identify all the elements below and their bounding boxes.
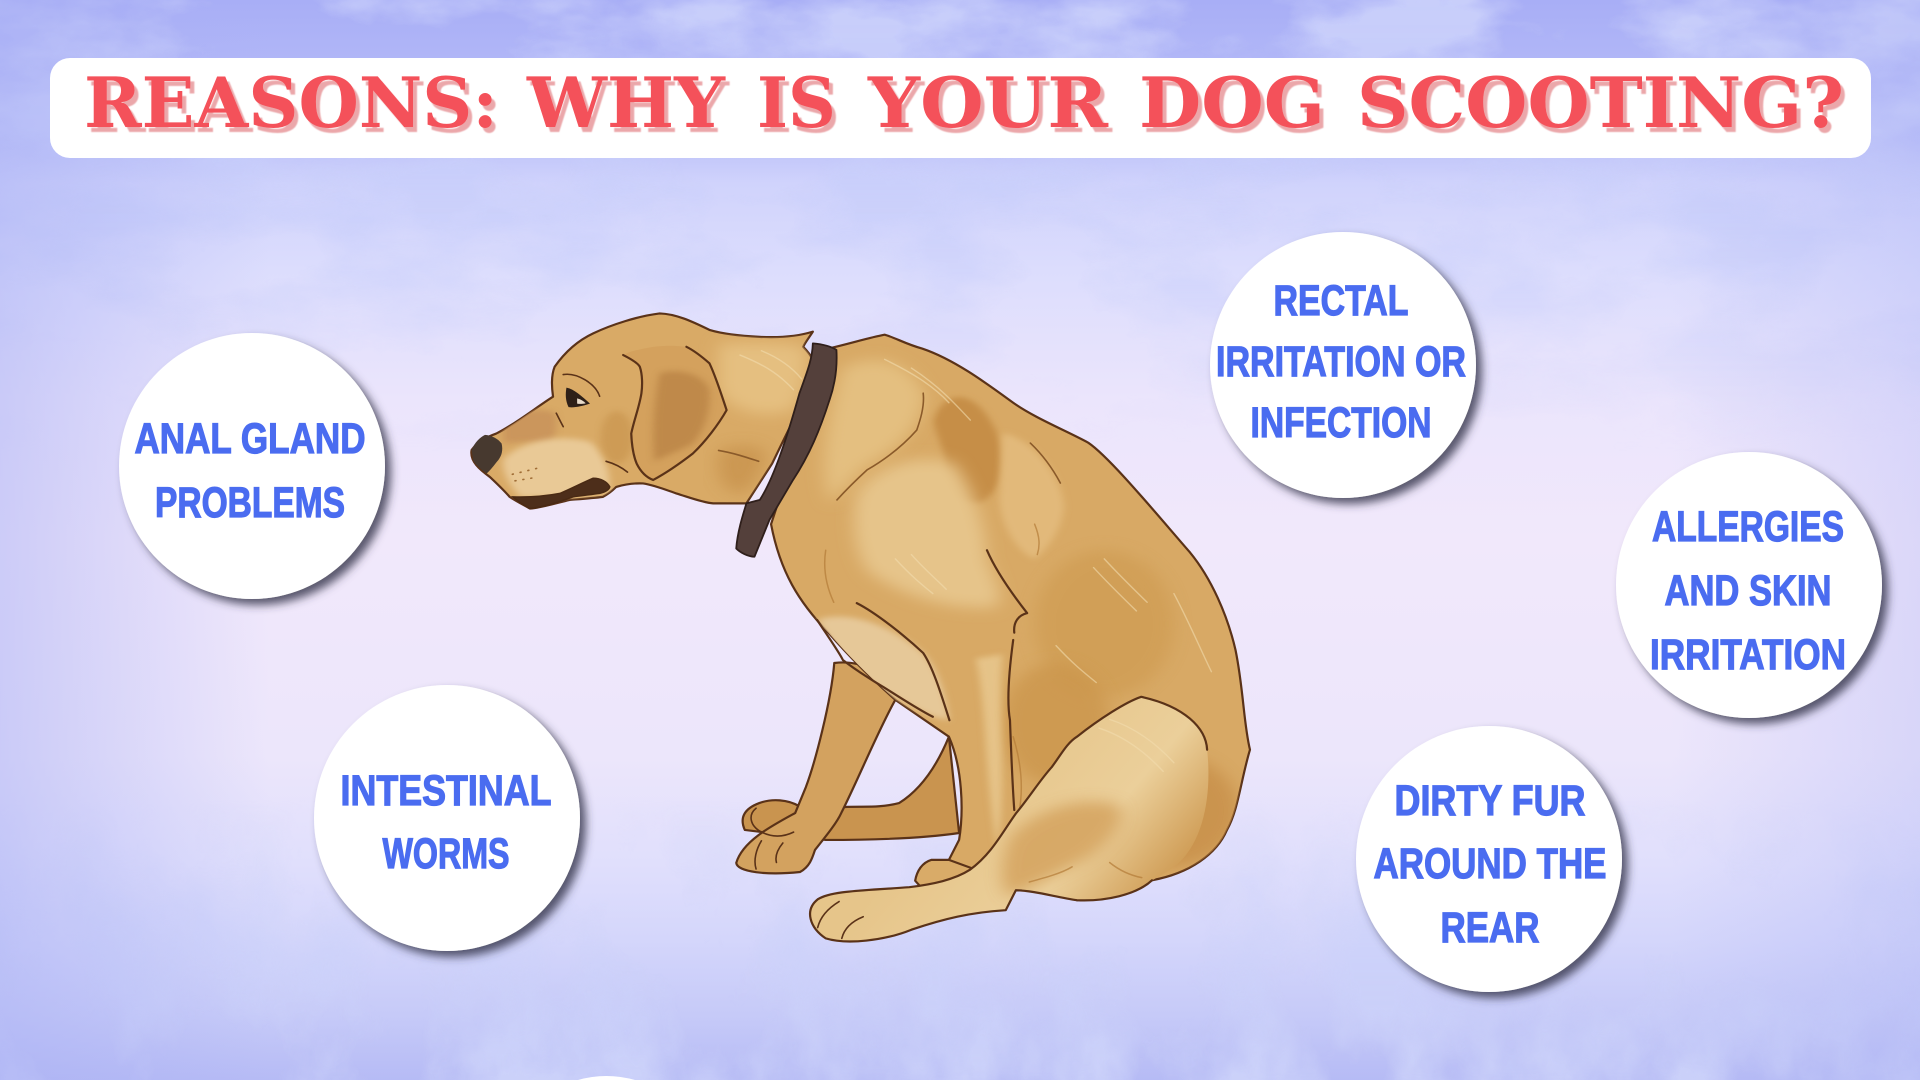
callout: rectal irritation or infection: IRRITATION OR [1216,338,1466,386]
thigh and hind foot [810,697,1208,941]
chest contour lines [817,603,949,720]
ear [623,346,727,480]
mouth [513,478,610,509]
far front leg and paw [736,662,895,873]
title banner [50,58,1871,158]
thigh shading [1002,719,1174,897]
title text: YOUR [867,63,1109,144]
illustration: sitting dog [471,313,1250,941]
head [471,313,813,509]
title text: SCOOTING? [1357,63,1844,144]
nose [472,435,502,473]
shoulder and leg contour lines [987,550,1027,810]
callout: anal gland problems [119,333,385,599]
hind foot toe lines [818,902,863,938]
callout: allergies and skin irritation: AND SKIN [1664,567,1832,615]
ear outline [623,347,727,480]
title text: REASONS: [84,63,498,144]
callout: rectal irritation or infection: INFECTION [1250,399,1432,447]
callout: rectal irritation or infection [1210,232,1476,498]
far hind leg and paw [743,737,959,840]
title text: DOG [1139,63,1325,144]
small partial circle at bottom edge [578,1076,635,1080]
callout: anal gland problems: ANAL GLAND [134,415,366,463]
callout: allergies and skin irritation [1616,452,1882,718]
eye [566,388,590,407]
callout: rectal irritation or infection: RECTAL [1274,277,1408,325]
muzzle whisker dots [512,468,539,481]
callout: dirty fur around the rear: AROUND THE [1374,840,1606,888]
ear shading [652,370,711,460]
banner panel [50,58,1871,158]
body shading [817,359,1238,867]
callout: dirty fur around the rear: DIRTY FUR [1394,777,1586,825]
near paw behind thigh [915,854,997,889]
callout: intestinal worms [314,685,580,951]
title text: WHY [526,63,726,144]
callout: dirty fur around the rear: REAR [1440,904,1540,952]
callout: intestinal worms: WORMS [382,830,510,878]
brow and cheek lines [556,374,627,472]
fur arc lines [837,393,1060,500]
thigh and foot contour lines [810,697,1207,941]
title text: IS [757,63,836,144]
fur streaks [885,359,1211,682]
callout: dirty fur around the rear [1356,726,1622,992]
muzzle highlight and shading [503,410,633,497]
neck shading and fur [718,343,806,494]
callout: anal gland problems: PROBLEMS [155,479,345,527]
callout: allergies and skin irritation: ALLERGIES [1652,503,1844,551]
callout: allergies and skin irritation: IRRITATION [1650,631,1846,679]
callout: intestinal worms: INTESTINAL [340,767,552,815]
body [771,335,1250,900]
title text [84,63,1844,144]
collar [736,343,837,557]
far paw toe lines [751,808,794,869]
